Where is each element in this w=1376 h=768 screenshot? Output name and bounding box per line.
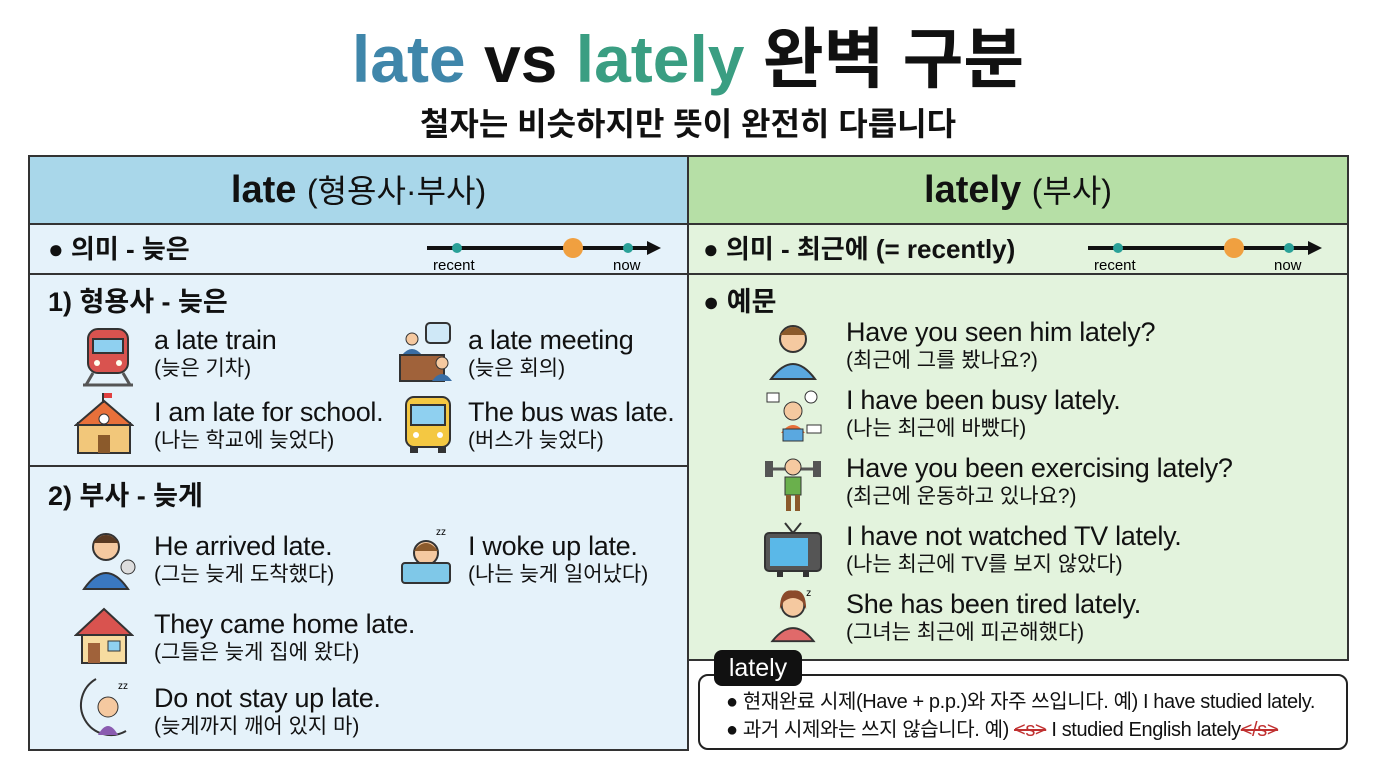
icon: tired woman: z — [806, 588, 811, 599]
section 1: adjective: (늦은 기차) — [154, 357, 251, 380]
examples: (그녀는 최근에 피곤해했다) — [846, 621, 1084, 644]
label: lately tag: lately — [729, 654, 787, 682]
section 1: adjective — [30, 277, 687, 467]
meaning row: ● 의미 - 최근에 (= recently) — [703, 234, 1015, 264]
icon: tired woman — [770, 588, 816, 642]
timeline — [427, 238, 661, 273]
heading: late: late (형용사·부사) — [231, 169, 486, 211]
icon: woke up — [401, 527, 451, 584]
examples: (최근에 그를 봤나요?) — [846, 349, 1038, 372]
icon: meeting — [399, 322, 452, 382]
section 2: adverb: 2) 부사 - 늦게 — [48, 481, 203, 511]
section 1: adjective: (나는 학교에 늦었다) — [154, 429, 334, 452]
timeline — [1088, 238, 1322, 273]
section 2: adverb: (늦게까지 깨어 있지 마) — [154, 715, 359, 738]
section 2: adverb: (그들은 늦게 집에 왔다) — [154, 641, 359, 664]
section 1: adjective: The bus was late. — [468, 397, 675, 427]
panel: lately — [687, 155, 1349, 661]
examples: ● 예문 — [703, 287, 776, 317]
icon: woke up: zz — [436, 527, 446, 538]
section 1: adjective: (늦은 회의) — [468, 357, 565, 380]
icon: school — [74, 393, 134, 454]
icon: moon girl — [80, 678, 128, 736]
callout: lately note — [698, 674, 1348, 750]
examples: (나는 최근에 바빴다) — [846, 417, 1026, 440]
panel: late — [28, 155, 689, 751]
section 1: adjective: 1) 형용사 - 늦은 — [48, 287, 228, 317]
section 2: adverb: I woke up late. — [468, 531, 638, 561]
meaning row — [30, 225, 687, 275]
icon: train — [83, 328, 133, 386]
examples: I have been busy lately. — [846, 385, 1120, 415]
heading: late — [30, 157, 687, 225]
section 1: adjective: (버스가 늦었다) — [468, 429, 604, 452]
icon: house — [74, 608, 134, 664]
icon: TV — [764, 522, 822, 577]
title: late vs lately 완벽 구분 — [352, 22, 1024, 96]
meaning row — [689, 225, 1347, 275]
icon: bus — [405, 396, 451, 453]
icon: man arriving — [82, 533, 136, 590]
section 1: adjective: a late meeting — [468, 325, 633, 355]
examples: (나는 최근에 TV를 보지 않았다) — [846, 553, 1123, 576]
examples: I have not watched TV lately. — [846, 521, 1182, 551]
subtitle: 철자는 비슷하지만 뜻이 완전히 다릅니다 — [420, 106, 956, 142]
section 2: adverb: Do not stay up late. — [154, 683, 381, 713]
section 1: adjective: a late train — [154, 325, 276, 355]
examples: (최근에 운동하고 있나요?) — [846, 485, 1077, 508]
icon: exercise — [765, 458, 821, 511]
callout: lately note: ● 현재완료 시제(Have + p.p.)와 자주 쓰입니다. 예) I have studied lately. — [726, 691, 1315, 713]
examples: She has been tired lately. — [846, 589, 1141, 619]
section 2: adverb: (그는 늦게 도착했다) — [154, 563, 334, 586]
section 2: adverb — [48, 481, 648, 738]
examples: Have you been exercising lately? — [846, 453, 1233, 483]
section 2: adverb: (나는 늦게 일어났다) — [468, 563, 648, 586]
callout: lately note: ● 과거 시제와는 쓰지 않습니다. 예) <s> I studied English lately</s> — [726, 719, 1278, 741]
section 2: adverb: He arrived late. — [154, 531, 332, 561]
icon: man — [769, 325, 817, 380]
label: lately tag — [714, 650, 802, 686]
section 1: adjective: I am late for school. — [154, 397, 383, 427]
icon: busy — [766, 390, 822, 442]
meaning row: ● 의미 - 늦은 — [48, 234, 190, 264]
examples: Have you seen him lately? — [846, 317, 1155, 347]
heading: lately: lately (부사) — [924, 169, 1112, 211]
examples — [703, 287, 1233, 644]
icon: moon girl: zz — [118, 681, 128, 692]
section 2: adverb: They came home late. — [154, 609, 415, 639]
heading: lately — [689, 157, 1347, 225]
